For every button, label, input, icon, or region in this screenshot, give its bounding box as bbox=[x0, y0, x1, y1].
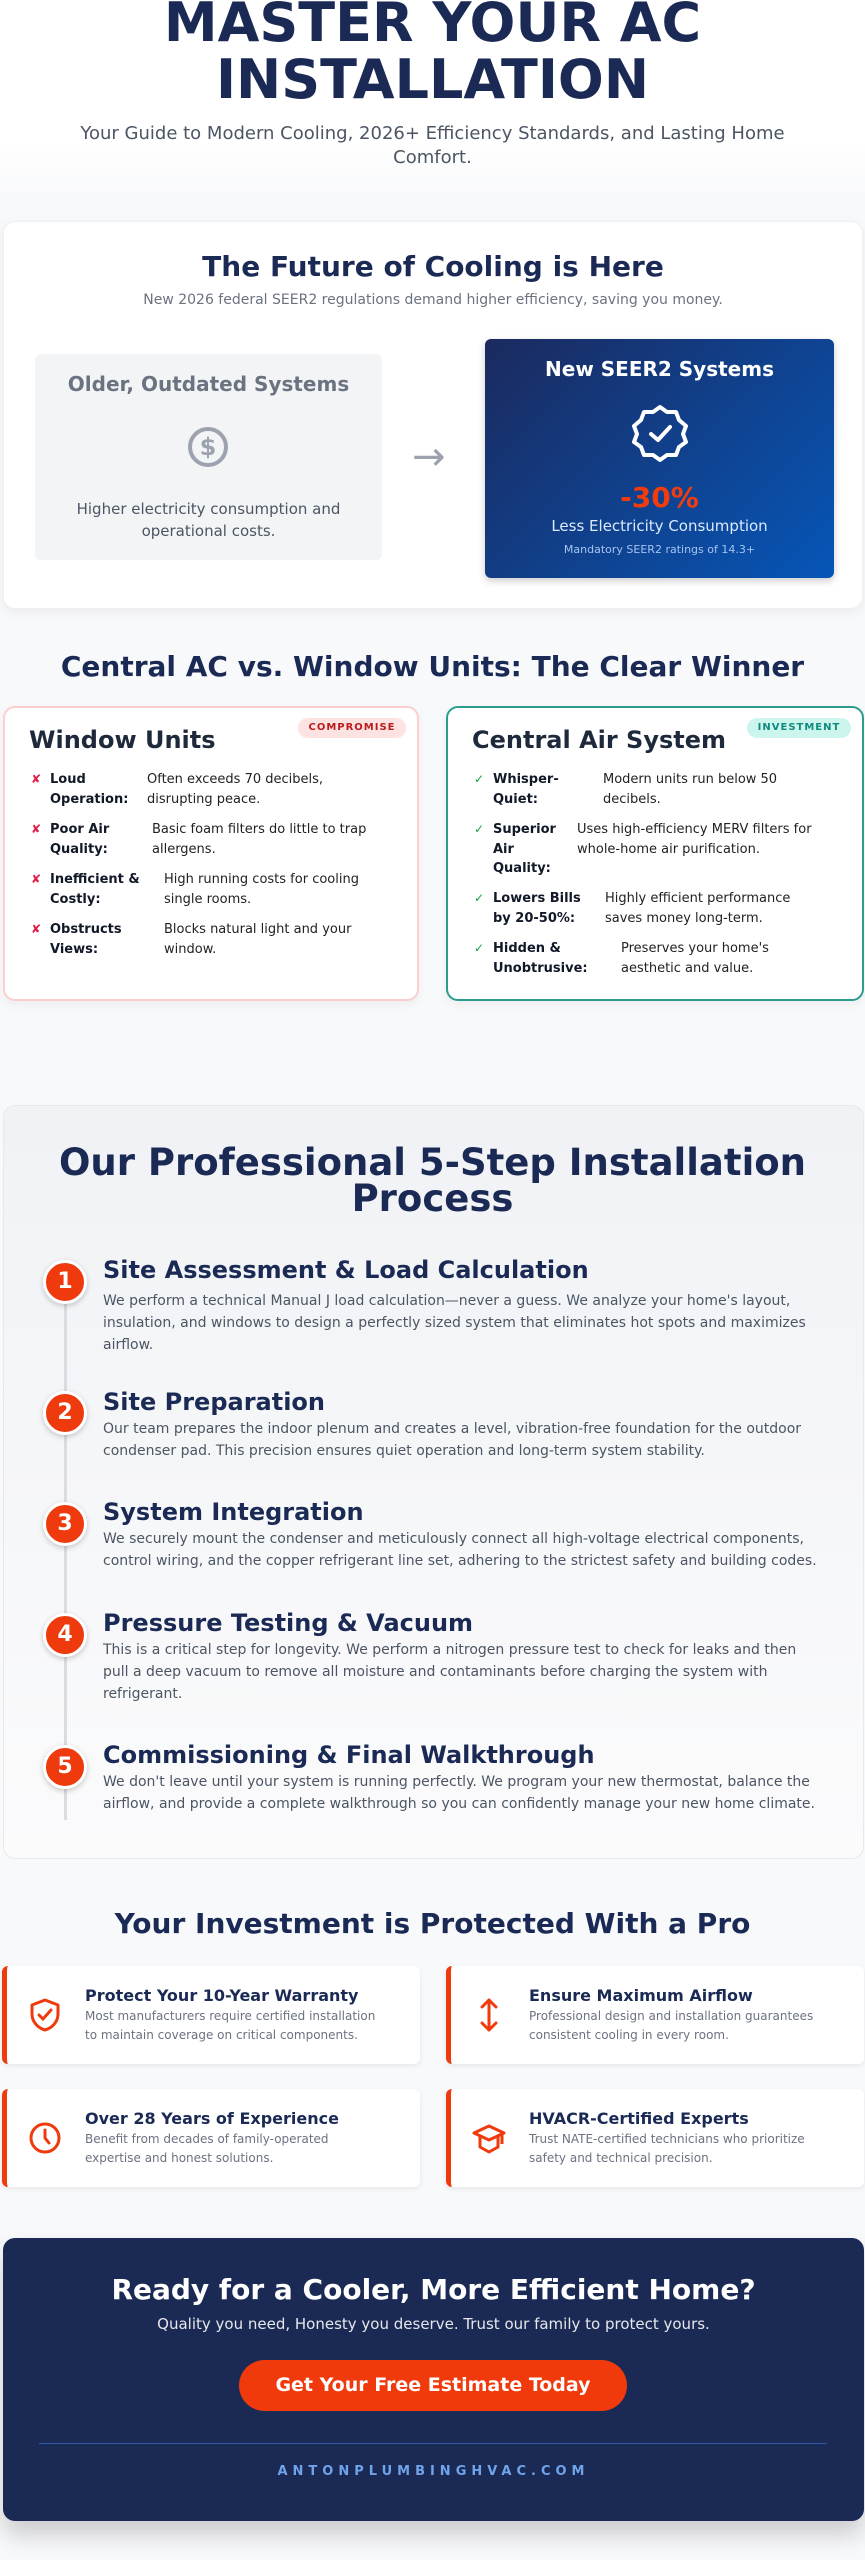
card: airflow: Professional design and installation guarantees consistent cooling in every room. bbox=[529, 2009, 813, 2042]
panel: 5-step process bbox=[3, 1105, 864, 1859]
list item: High running costs for cooling single rooms. bbox=[164, 872, 359, 906]
list item bbox=[474, 822, 812, 876]
list item bbox=[474, 772, 777, 806]
panel title: Window Units bbox=[29, 726, 216, 754]
heading: process: Our Professional 5-Step Installation bbox=[59, 1141, 806, 1184]
step 5 bbox=[40, 1741, 815, 1812]
step 4 bbox=[40, 1609, 796, 1702]
icon: up-down arrow bbox=[480, 1998, 498, 2032]
number: 4 bbox=[57, 1622, 73, 1647]
list item: Blocks natural light and your window. bbox=[164, 922, 351, 956]
list item bbox=[474, 941, 769, 976]
card: experience bbox=[2, 2089, 420, 2187]
number: 1 bbox=[57, 1269, 73, 1294]
number: 5 bbox=[57, 1754, 73, 1779]
number bbox=[43, 1745, 87, 1789]
title bbox=[164, 0, 701, 111]
stat label: Less Electricity Consumption bbox=[551, 517, 768, 535]
list item: ✘ bbox=[31, 822, 41, 836]
list item: ✘ bbox=[31, 772, 41, 786]
card: certified: HVACR-Certified Experts bbox=[529, 2109, 749, 2128]
button: Get Your Free Estimate Today bbox=[275, 2374, 591, 2396]
step 3 bbox=[40, 1498, 817, 1569]
CTA subtext: Quality you need, Honesty you deserve. Trust our family to protect yours. bbox=[157, 2315, 710, 2333]
number: 2 bbox=[57, 1400, 73, 1425]
list item: Uses high-efficiency MERV filters for whole-home air purification. bbox=[577, 822, 812, 856]
card: warranty bbox=[2, 1966, 420, 2064]
step body: We don't leave until your system is running perfectly. We program your new thermostat, balance the airflow, and provide a complete walkthrough so you can confidently manage your new home climate. bbox=[103, 1774, 815, 1812]
list item bbox=[31, 872, 359, 906]
list item: ✓ bbox=[474, 941, 484, 955]
card: experience: Benefit from decades of family-operated expertise and honest solutions. bbox=[85, 2132, 329, 2165]
step title: System Integration bbox=[103, 1498, 364, 1526]
icon: dollar: $ bbox=[200, 433, 216, 461]
list item: Basic foam filters do little to trap allergens. bbox=[152, 822, 366, 856]
badge: compromise bbox=[298, 718, 406, 738]
list item: Modern units run below 50 decibels. bbox=[603, 772, 777, 806]
number: 3 bbox=[57, 1511, 73, 1536]
icon: dollar bbox=[188, 427, 228, 467]
badge: investment: INVESTMENT bbox=[758, 722, 840, 733]
website url: ANTONPLUMBINGHVAC.COM bbox=[277, 2464, 590, 2479]
list item bbox=[31, 822, 366, 856]
panel: future of cooling bbox=[3, 221, 863, 609]
step body: We perform a technical Manual J load calculation—never a guess. We analyze your home's layout, insulation, and windows to design a perfectly sized system that eliminates hot spots and maximizes airflow. bbox=[103, 1293, 806, 1353]
CTA heading: Ready for a Cooler, More Efficient Home? bbox=[111, 2273, 756, 2306]
step body: We securely mount the condenser and meticulously connect all high-voltage electrical components, control wiring, and the copper refrigerant line set, adhering to the strictest safety and building codes. bbox=[103, 1531, 817, 1569]
step 2 bbox=[40, 1388, 801, 1459]
list item bbox=[31, 922, 352, 956]
number bbox=[43, 1502, 87, 1546]
badge: investment bbox=[747, 718, 851, 738]
heading: process bbox=[59, 1141, 806, 1220]
list item: Whisper-Quiet: bbox=[493, 772, 559, 806]
heading: process: Process bbox=[352, 1177, 513, 1220]
panel: call to action bbox=[3, 2238, 864, 2521]
card: warranty: Protect Your 10-Year Warranty bbox=[85, 1986, 358, 2005]
list item: Inefficient & Costly: bbox=[50, 872, 140, 906]
header background bbox=[0, 0, 865, 200]
card: certified bbox=[446, 2089, 864, 2187]
list item: Often exceeds 70 decibels, disrupting peace. bbox=[147, 772, 323, 806]
icon: badge check bbox=[632, 405, 688, 462]
box title: New SEER2 Systems bbox=[545, 357, 774, 381]
box title: Older, Outdated Systems bbox=[68, 372, 349, 396]
box: older systems bbox=[35, 354, 382, 560]
number bbox=[43, 1613, 87, 1657]
list item: Hidden & Unobtrusive: bbox=[493, 941, 588, 976]
icon: shield bbox=[30, 1998, 60, 2032]
list item: Poor Air Quality: bbox=[50, 822, 109, 856]
step title: Commissioning & Final Walkthrough bbox=[103, 1741, 595, 1769]
box text: Higher electricity consumption and operational costs. bbox=[77, 500, 340, 540]
panel: window units bbox=[3, 706, 419, 1001]
list item: ✓ bbox=[474, 891, 484, 905]
list item: ✘ bbox=[31, 922, 41, 936]
panel title: Central Air System bbox=[472, 726, 726, 754]
icon: clock bbox=[30, 2122, 60, 2154]
number bbox=[43, 1391, 87, 1435]
list item: Loud Operation: bbox=[50, 772, 128, 806]
panel: central air bbox=[446, 706, 864, 1001]
list item: Superior Air Quality: bbox=[493, 822, 556, 876]
card: airflow bbox=[446, 1966, 864, 2064]
arrow: → bbox=[412, 434, 446, 480]
timeline line bbox=[64, 1282, 67, 1820]
note: Mandatory SEER2 ratings of 14.3+ bbox=[564, 543, 755, 556]
box: new SEER2 bbox=[485, 339, 834, 578]
button bbox=[239, 2360, 627, 2411]
heading: comparison: Central AC vs. Window Units: The Clear Winner bbox=[61, 650, 804, 683]
card: experience: Over 28 Years of Experience bbox=[85, 2109, 339, 2128]
list item: Lowers Bills by 20-50%: bbox=[493, 891, 581, 926]
heading: investment: Your Investment is Protected With a Pro bbox=[115, 1907, 750, 1940]
title: INSTALLATION bbox=[216, 48, 649, 111]
heading: The Future of Cooling is Here bbox=[202, 250, 664, 283]
step title: Site Assessment & Load Calculation bbox=[103, 1256, 589, 1284]
list item bbox=[31, 772, 323, 806]
subtitle: Your Guide to Modern Cooling, 2026+ Efficiency Standards, and Lasting Home Comfort. bbox=[80, 123, 785, 168]
list item: ✓ bbox=[474, 772, 484, 786]
number bbox=[43, 1260, 87, 1304]
list item: Obstructs Views: bbox=[50, 922, 122, 956]
step title: Pressure Testing & Vacuum bbox=[103, 1609, 473, 1637]
step title: Site Preparation bbox=[103, 1388, 325, 1416]
card: airflow: Ensure Maximum Airflow bbox=[529, 1986, 753, 2005]
step body: This is a critical step for longevity. We perform a nitrogen pressure test to check for leaks and then pull a deep vacuum to remove all moisture and contaminants before charging the system with refrigerant. bbox=[103, 1642, 796, 1702]
subheading: New 2026 federal SEER2 regulations demand higher efficiency, saving you money. bbox=[143, 292, 723, 308]
badge: compromise: COMPROMISE bbox=[308, 722, 396, 733]
list item: ✘ bbox=[31, 872, 41, 886]
card: warranty: Most manufacturers require certified installation to maintain coverage on critical components. bbox=[85, 2009, 375, 2042]
list item: ✓ bbox=[474, 822, 484, 836]
step body: Our team prepares the indoor plenum and creates a level, vibration-free foundation for the outdoor condenser pad. This precision ensures quiet operation and long-term system stability. bbox=[103, 1421, 801, 1459]
list item: Preserves your home's aesthetic and value. bbox=[621, 941, 769, 976]
list item: Highly efficient performance saves money long-term. bbox=[605, 891, 790, 926]
step 1 bbox=[40, 1256, 806, 1353]
card: certified: Trust NATE-certified technicians who prioritize safety and technical precision. bbox=[529, 2132, 805, 2165]
list item bbox=[474, 891, 790, 926]
icon: graduation cap bbox=[472, 2124, 506, 2154]
stat -30%: -30% bbox=[620, 481, 699, 514]
